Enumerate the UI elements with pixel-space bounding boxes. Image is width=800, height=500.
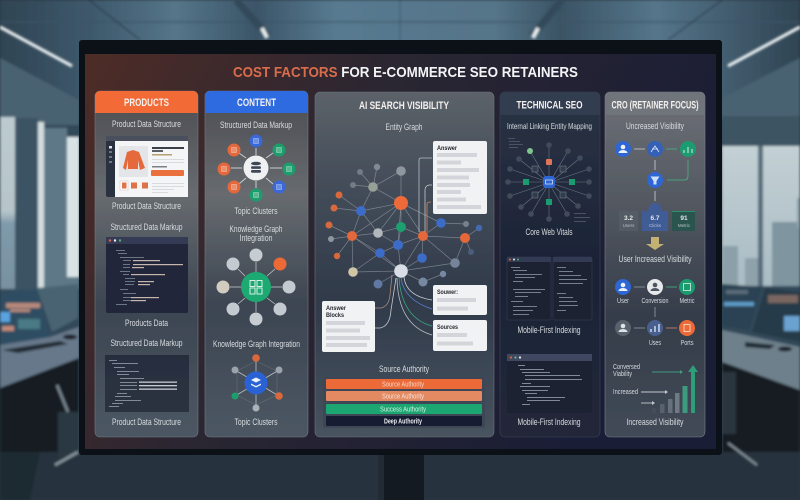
products header: [95, 91, 198, 113]
conversion flow: User: [617, 298, 630, 305]
metric cards: Users: [623, 223, 635, 228]
sources card: Sources: [437, 324, 458, 331]
metric cards: Clicks: [649, 223, 662, 228]
monitor bezel: [79, 40, 722, 455]
metric cards: 91: [680, 215, 688, 222]
metric cards: 6.7: [650, 215, 660, 222]
content header: [205, 91, 308, 113]
answer blocks card: Blocks: [326, 312, 344, 319]
label: Product Data Structure: [112, 201, 181, 212]
label: Product Data Structure: [112, 119, 181, 130]
panel: content: [205, 91, 308, 437]
label: Structured Data Markup: [110, 222, 182, 233]
souwer card: [433, 285, 487, 315]
conversion flow: Conversion: [642, 298, 669, 305]
panel header: [500, 92, 600, 115]
label: Uncreased Visibility: [626, 121, 684, 132]
label: Structured Data Markup: [220, 120, 292, 131]
label: Knowledge Graph Integration: [213, 339, 300, 350]
panel heading: AI SEARCH VISIBILITY: [359, 100, 449, 112]
answer card: [433, 141, 487, 214]
panel: technical seo: [500, 92, 600, 437]
desks: [0, 327, 79, 388]
visibility growth chart: Viability: [613, 371, 632, 378]
ceiling light strips: [0, 27, 800, 66]
panel header: [605, 92, 705, 115]
panel header: TECHNICAL SEO: [516, 100, 583, 112]
panel: cro: [605, 92, 705, 437]
label: Topic Clusters: [234, 206, 278, 217]
label: Source Authority: [379, 364, 429, 375]
ceiling lamps: [236, 0, 562, 38]
title: COST FACTORS FOR E-COMMERCE SEO RETAINERS: [233, 64, 578, 81]
icon: down arrow: [646, 237, 664, 250]
right desk monitors: [722, 284, 762, 330]
metric cards: 3.2: [624, 215, 633, 222]
panel: ai search visibility: [315, 92, 494, 437]
topic cluster diagram: [218, 134, 296, 202]
content header: CONTENT: [237, 97, 276, 109]
conversion flow: [615, 279, 695, 347]
small topic cluster: [232, 354, 283, 412]
entity graph: [326, 158, 482, 335]
answer blocks card: [322, 301, 375, 352]
label: Increased Visibility: [626, 417, 684, 428]
label: Product Data Structure: [112, 417, 181, 428]
right window: [722, 116, 800, 146]
label: Mobile-First Indexing: [518, 325, 580, 336]
answer card: Answer: [437, 145, 457, 152]
knowledge graph diagram: [216, 248, 296, 326]
label: Knowledge Graph: [230, 224, 282, 235]
conversion flow: Uses: [649, 340, 661, 347]
label: Core Web Vitals: [526, 227, 573, 238]
source authority stack: Success Authority: [380, 406, 426, 414]
visibility growth chart: Increased: [613, 389, 638, 396]
source authority stack: Deep Authority: [384, 418, 422, 426]
label: Products Data: [125, 318, 169, 329]
label: Integration: [240, 233, 272, 244]
label: Internal Linking Entity Mapping: [507, 121, 592, 131]
visibility growth chart: Conversed: [613, 364, 640, 371]
label: Entity Graph: [386, 122, 422, 133]
left desk monitors: [0, 289, 50, 345]
label: Topic Clusters: [234, 417, 278, 428]
screen: [85, 54, 716, 449]
left window: [0, 117, 15, 289]
source authority stack: [323, 376, 485, 428]
label: Structured Data Markup: [110, 338, 182, 349]
conversion flow: Ports: [680, 340, 694, 347]
sources card: [433, 320, 487, 351]
label: [230, 224, 282, 244]
code window: [106, 237, 188, 313]
panel header: CRO (RETAINER FOCUS): [612, 100, 699, 112]
label: Mobile-First Indexing: [518, 417, 580, 428]
source authority stack: Source Authority: [382, 382, 424, 388]
visibility growth chart: [613, 364, 698, 413]
internal linking graph: [505, 138, 592, 222]
monitor stand: [378, 455, 424, 500]
label: User Increased Visibility: [618, 254, 692, 265]
code window: [507, 354, 592, 413]
souwer card: Souwer:: [437, 289, 458, 296]
source authority stack: Source Authority: [382, 394, 424, 400]
funnel flow: [615, 141, 696, 201]
products header: PRODUCTS: [124, 97, 169, 109]
code windows: [507, 257, 592, 320]
code block: [105, 355, 189, 412]
panel: products: [95, 91, 198, 437]
metric cards: Metric: [678, 223, 691, 228]
answer blocks card: Answer: [326, 305, 346, 312]
conversion flow: Metric: [680, 298, 695, 305]
product page mockup: [106, 136, 188, 197]
metric cards: [619, 203, 695, 231]
